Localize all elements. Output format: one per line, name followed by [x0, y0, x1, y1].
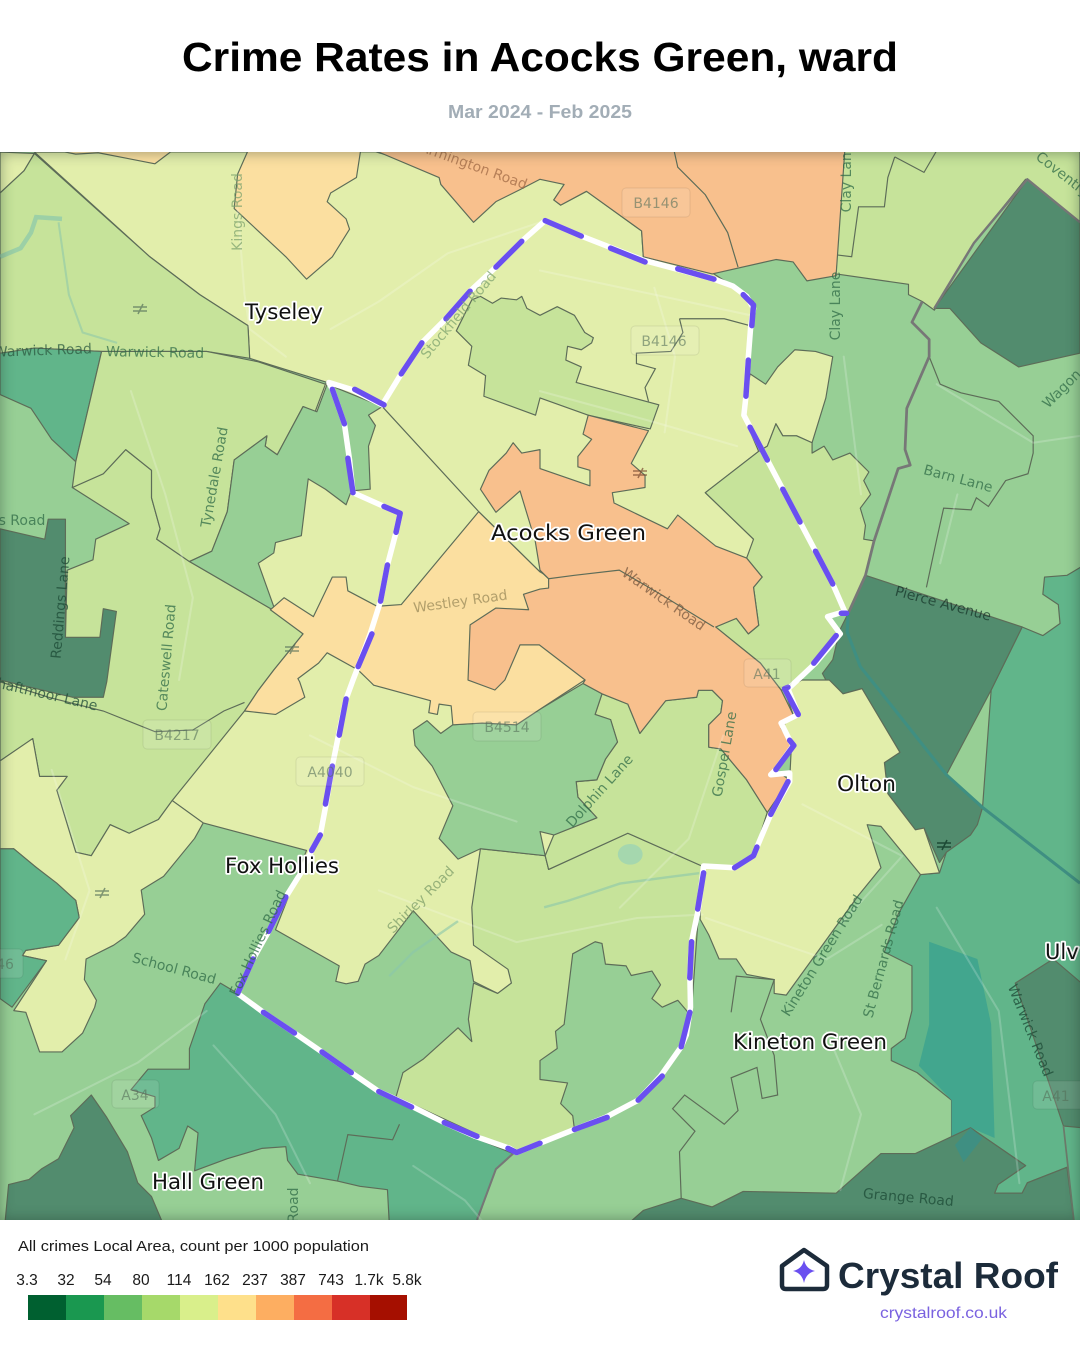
- legend colour ramp: [28, 1295, 407, 1320]
- legend scale values: [16, 1272, 422, 1289]
- brand name: Crystal Roof: [838, 1255, 1059, 1296]
- road name labels: School Road: [130, 950, 218, 988]
- road name labels: Stockfield Road: [418, 269, 500, 362]
- choropleth map panel: [0, 152, 1080, 1220]
- road name labels: Reddings Lane: [49, 556, 73, 660]
- legend scale values: 3.3: [16, 1272, 38, 1289]
- road name labels: Shirley Road: [384, 863, 458, 937]
- road number shields: B4514: [484, 720, 530, 736]
- road name labels: Cateswell Road: [154, 604, 180, 712]
- crime rate areas: [0, 151, 1080, 1221]
- road name labels: Grange Road: [862, 1186, 954, 1210]
- legend scale values: 114: [167, 1272, 192, 1289]
- ward boundary: white underlay: [238, 221, 845, 1153]
- legend: [16, 1238, 422, 1320]
- road number shields: B4217: [154, 728, 200, 744]
- website url: crystalroof.co.uk: [880, 1305, 1008, 1322]
- road name labels: Warwick Road: [619, 565, 708, 634]
- legend scale values: 80: [132, 1272, 150, 1289]
- title: Crime Rates in Acocks Green, ward: [182, 34, 898, 80]
- road name labels: St Bernards Road: [861, 898, 908, 1020]
- legend scale values: 32: [57, 1272, 75, 1289]
- road name labels: Dolphin Lane: [563, 752, 637, 831]
- legend scale values: 743: [318, 1272, 344, 1289]
- legend scale values: 1.7k: [354, 1272, 384, 1289]
- road number shields: [0, 188, 1080, 1109]
- place name labels: Fox Hollies: [225, 854, 339, 878]
- road name labels: Fox Hollies Road: [227, 888, 290, 999]
- road number shields: B4146: [641, 334, 687, 350]
- road name labels: Gospel Lane: [710, 710, 740, 798]
- road name labels: Westley Road: [412, 588, 508, 617]
- minor boundaries, roads and waterways: [0, 152, 1080, 1221]
- date range subtitle: Mar 2024 - Feb 2025: [448, 102, 632, 122]
- road name labels: Kings Road: [230, 173, 246, 251]
- legend scale values: 54: [94, 1272, 112, 1289]
- legend title: All crimes Local Area, count per 1000 population: [18, 1238, 369, 1255]
- road name labels: Warwick Road: [1004, 982, 1055, 1079]
- place name labels: Acocks Green: [491, 521, 646, 545]
- map base colour: [0, 152, 1080, 1220]
- railway station icons: [95, 304, 951, 898]
- ward boundary: purple dashes: [238, 221, 847, 1153]
- legend scale values: 237: [242, 1272, 268, 1289]
- road name labels: Tynedale Road: [198, 426, 232, 530]
- road name labels: Clay Lane: [828, 272, 844, 340]
- legend scale values: 387: [280, 1272, 306, 1289]
- road number shields: A41: [753, 667, 781, 683]
- road name labels: Warwick Road: [106, 344, 204, 362]
- legend scale values: 162: [204, 1272, 230, 1289]
- road number shields: A34: [121, 1088, 149, 1104]
- icon: house with star: [782, 1250, 827, 1289]
- road number shields: B4146: [633, 196, 679, 212]
- place name labels: Olton: [837, 772, 896, 796]
- place name labels: Hall Green: [152, 1170, 264, 1194]
- place name labels: Kineton Green: [733, 1030, 887, 1054]
- Crystal Roof logo: [780, 1248, 1059, 1322]
- road name labels: Pierce Avenue: [893, 584, 993, 625]
- legend scale values: 5.8k: [392, 1272, 422, 1289]
- road number shields: A4040: [307, 765, 353, 781]
- road number shields: A41: [1042, 1089, 1070, 1105]
- road name labels: Barn Lane: [922, 462, 994, 496]
- place name labels: [152, 300, 1079, 1194]
- place name labels: Tyseley: [244, 300, 323, 324]
- place name labels: Ulv: [1045, 940, 1079, 964]
- road name labels: Kineton Green Road: [779, 892, 866, 1019]
